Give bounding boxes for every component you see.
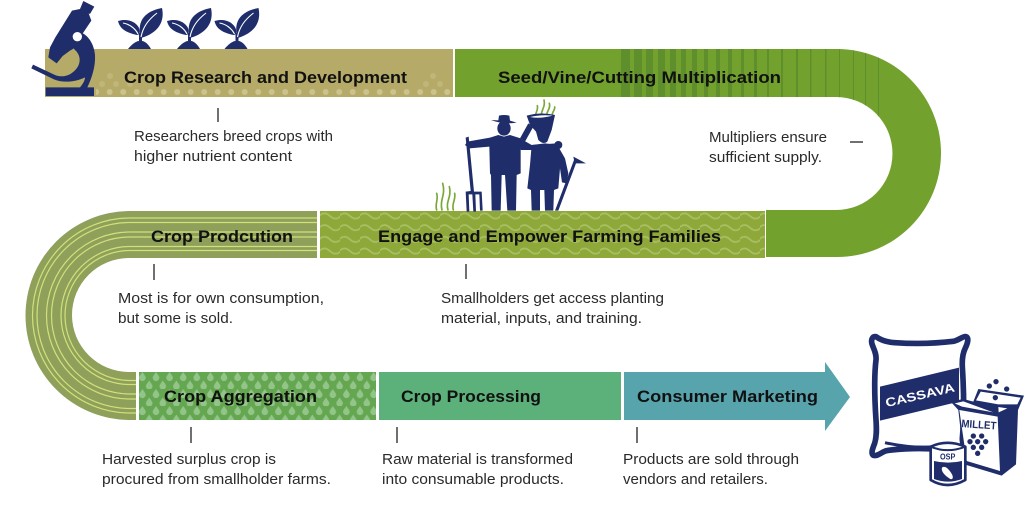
text: consumption: but some is sold. [118, 310, 233, 327]
icon: millet box: MILLET [961, 418, 997, 433]
text: researchers: higher nutrient content [134, 148, 293, 165]
heading: processing: Crop Processing [401, 388, 541, 406]
icon: seedlings [118, 8, 259, 49]
text: researchers [134, 128, 333, 165]
panel: Crop Research and Development band [45, 49, 453, 97]
icon: cassava sack [872, 337, 968, 456]
icon: microscope [31, 1, 95, 96]
text: multipliers [709, 129, 827, 166]
icon: can [931, 443, 965, 485]
text: retail: Products are sold through [623, 451, 799, 468]
heading: multiplication: Seed/Vine/Cutting Multiplication [498, 69, 781, 87]
panel: Crop Production band with left curve [26, 211, 317, 420]
panel: Crop Processing band [379, 372, 621, 420]
text: consumption: Most is for own consumption, [118, 290, 324, 307]
text: raw material [382, 451, 573, 488]
text: surplus: Harvested surplus crop is [102, 451, 276, 468]
text: consumption [118, 290, 324, 327]
tick marks [154, 108, 863, 443]
heading: engage: Engage and Empower Farming Families [378, 228, 721, 246]
text: multipliers: Multipliers ensure [709, 129, 827, 146]
text: raw material: into consumable products. [382, 471, 564, 488]
text: researchers: Researchers breed crops with [134, 128, 333, 145]
panel: Consumer Marketing arrow [624, 362, 850, 431]
icon: can: OSP [940, 453, 956, 462]
icon: farming family [436, 100, 586, 212]
text: retail [623, 451, 799, 488]
text: surplus [102, 451, 331, 488]
panel: Engage and Empower Farming Families band [320, 211, 765, 258]
icon: millet box [951, 379, 1024, 476]
text: retail: vendors and retailers. [623, 471, 768, 488]
heading: production: Crop Prodcution [151, 228, 293, 246]
panel: Crop Aggregation band [139, 372, 376, 420]
text: smallholders: Smallholders get access planting [441, 290, 664, 307]
heading: research: Crop Research and Development [124, 69, 408, 87]
heading: aggregation: Crop Aggregation [164, 388, 317, 406]
heading: marketing: Consumer Marketing [637, 388, 818, 406]
icon: food products [872, 337, 1024, 485]
panel: Seed/Vine/Cutting Multiplication band with right curve [455, 49, 941, 257]
text: surplus: procured from smallholder farms. [102, 471, 331, 488]
text: smallholders [441, 290, 664, 327]
icon: cassava sack: CASSAVA [884, 381, 956, 410]
text: multipliers: sufficient supply. [709, 149, 822, 166]
text: raw material: Raw material is transformed [382, 451, 573, 468]
text: smallholders: material, inputs, and training. [441, 310, 642, 327]
